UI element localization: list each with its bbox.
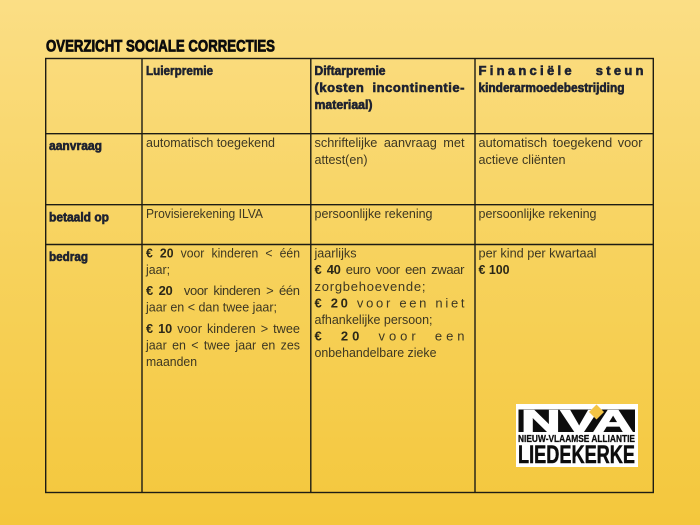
bedrag: Luierpremie: maanden [146, 354, 197, 369]
bedrag: Financiële steun [478, 246, 597, 277]
bedrag: Diftarpremie: jaarlijks [314, 246, 357, 260]
bedrag: Diftarpremie: afhankelijke persoon; [314, 312, 432, 327]
aanvraag: Financiële steun: actieve cliënten [478, 152, 566, 167]
row label: bedrag: bedrag [49, 249, 88, 264]
bedrag: Diftarpremie: € 40 euro voor een zwaar [314, 262, 465, 277]
column header: Financiële steun [478, 63, 644, 95]
bedrag: Luierpremie [145, 246, 300, 369]
aanvraag: Diftarpremie [314, 135, 465, 167]
logo: N-VA Liedekerke [516, 404, 638, 469]
column header: Financiële steun: kinderarmoedebestrijding [478, 80, 625, 95]
bedrag: Diftarpremie: onbehandelbare zieke [314, 345, 436, 360]
betaald op: Financiële steun: persoonlijke rekening [478, 206, 596, 221]
bedrag: Luierpremie: € 10 voor kinderen > twee [146, 321, 300, 336]
column header: Luierpremie: Luierpremie [146, 63, 213, 78]
bedrag: Financiële steun: per kind per kwartaal [478, 246, 597, 260]
logo: N-VA Liedekerke: NIEUW-VLAAMSE ALLIANTIE [518, 434, 635, 445]
table grid [46, 58, 653, 492]
aanvraag: Diftarpremie: attest(en) [314, 152, 368, 167]
column header: Diftarpremie: materiaal) [314, 97, 372, 112]
bedrag: Diftarpremie [314, 246, 465, 360]
bedrag: Luierpremie: € 20 voor kinderen < één [146, 246, 300, 260]
title: OVERZICHT SOCIALE CORRECTIES [46, 36, 275, 56]
row label: aanvraag: aanvraag [49, 138, 102, 153]
bedrag: Diftarpremie: € 20 voor een [314, 328, 464, 344]
bedrag: Diftarpremie: € 20 voor een niet [314, 296, 465, 310]
bedrag: Luierpremie: jaar en < dan twee jaar; [145, 300, 277, 314]
bedrag: Financiële steun: € 100 [478, 262, 510, 277]
betaald op: Diftarpremie: persoonlijke rekening [314, 206, 432, 221]
row label: betaald op: betaald op [49, 210, 109, 224]
column header: Diftarpremie [314, 63, 464, 112]
column header: Diftarpremie: (kosten incontinentie- [314, 80, 464, 95]
logo: N-VA Liedekerke: LIEDEKERKE [518, 441, 635, 469]
bedrag: Luierpremie: jaar en < twee jaar en zes [145, 338, 300, 352]
aanvraag: Financiële steun: automatisch toegekend voor [478, 135, 643, 150]
bedrag: Luierpremie: jaar; [145, 262, 170, 277]
bedrag: Luierpremie: € 20 voor kinderen > één [146, 283, 300, 298]
aanvraag: Luierpremie: automatisch toegekend [146, 135, 275, 150]
logo: N-VA Liedekerke: NVA [521, 404, 633, 438]
bedrag: Diftarpremie: zorgbehoevende; [314, 279, 426, 294]
column header: Financiële steun: Financiële steun [478, 63, 644, 78]
aanvraag: Diftarpremie: schriftelijke aanvraag met [314, 135, 465, 150]
aanvraag: Financiële steun [478, 135, 643, 167]
betaald op: Luierpremie: Provisierekening ILVA [146, 206, 263, 221]
column header: Diftarpremie: Diftarpremie [314, 63, 386, 78]
